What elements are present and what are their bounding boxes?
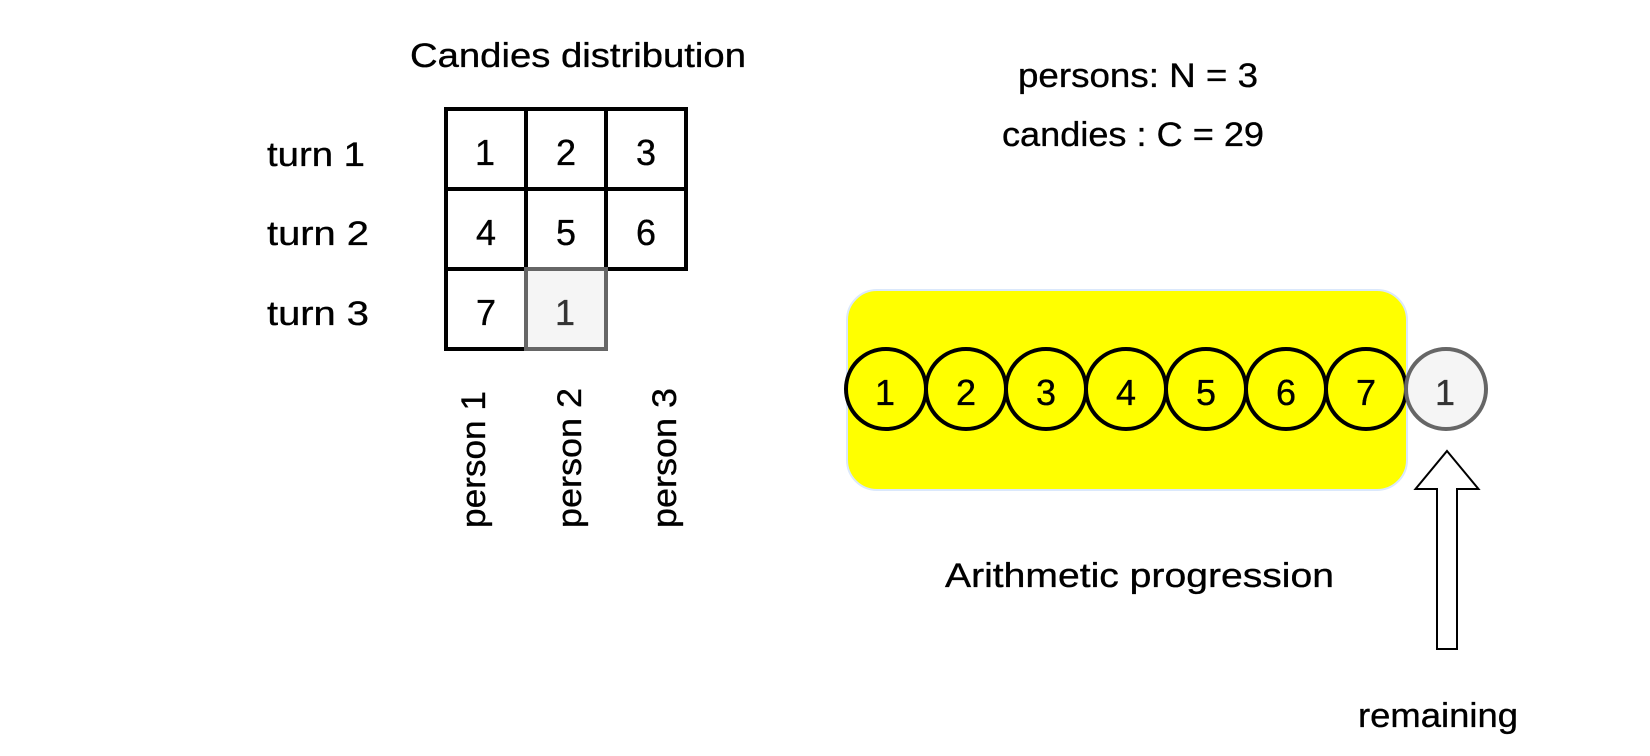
label: person 3: person 3 [646,388,684,528]
panel: arithmetic progression highlight [847,290,1407,490]
remaining circle [1406,349,1486,429]
cell values [475,132,656,333]
label: turn 3: turn 3 [267,295,369,333]
remaining cell [526,269,606,349]
cell values: 3 [636,132,656,173]
column labels [455,388,684,528]
circle values: 3 [1036,372,1056,413]
circle values: 6 [1276,372,1296,413]
text: arithmetic progression: Arithmetic progression [945,557,1334,595]
grid cells [446,109,686,349]
circle values: 5 [1196,372,1216,413]
label: turn 1: turn 1 [267,136,365,174]
remaining circle: 1 [1435,372,1455,413]
text: persons count: persons: N = 3 [1018,57,1258,95]
circle values: 4 [1116,372,1136,413]
circle values [875,372,1376,413]
cell values: 4 [476,212,496,253]
cell values: 6 [636,212,656,253]
text: candies count: candies : C = 29 [1002,116,1264,154]
text: remaining: remaining [1358,697,1518,735]
row labels [267,136,369,333]
arrow: up to remaining circle [1416,451,1478,649]
title: candies distribution: Candies distribution [410,37,746,75]
distribution grid [446,109,686,349]
circles 1 to 7 [846,349,1406,429]
cell values: 7 [476,292,496,333]
label: person 1: person 1 [455,391,493,528]
circle values: 2 [956,372,976,413]
circle values: 1 [875,372,895,413]
label: turn 2: turn 2 [267,215,369,253]
cell values: 1 [475,132,495,173]
progression circles [846,349,1406,429]
label: person 2: person 2 [551,388,589,528]
cell values: 1 [555,292,575,333]
cell values: 2 [556,132,576,173]
cell values: 5 [556,212,576,253]
circle values: 7 [1356,372,1376,413]
